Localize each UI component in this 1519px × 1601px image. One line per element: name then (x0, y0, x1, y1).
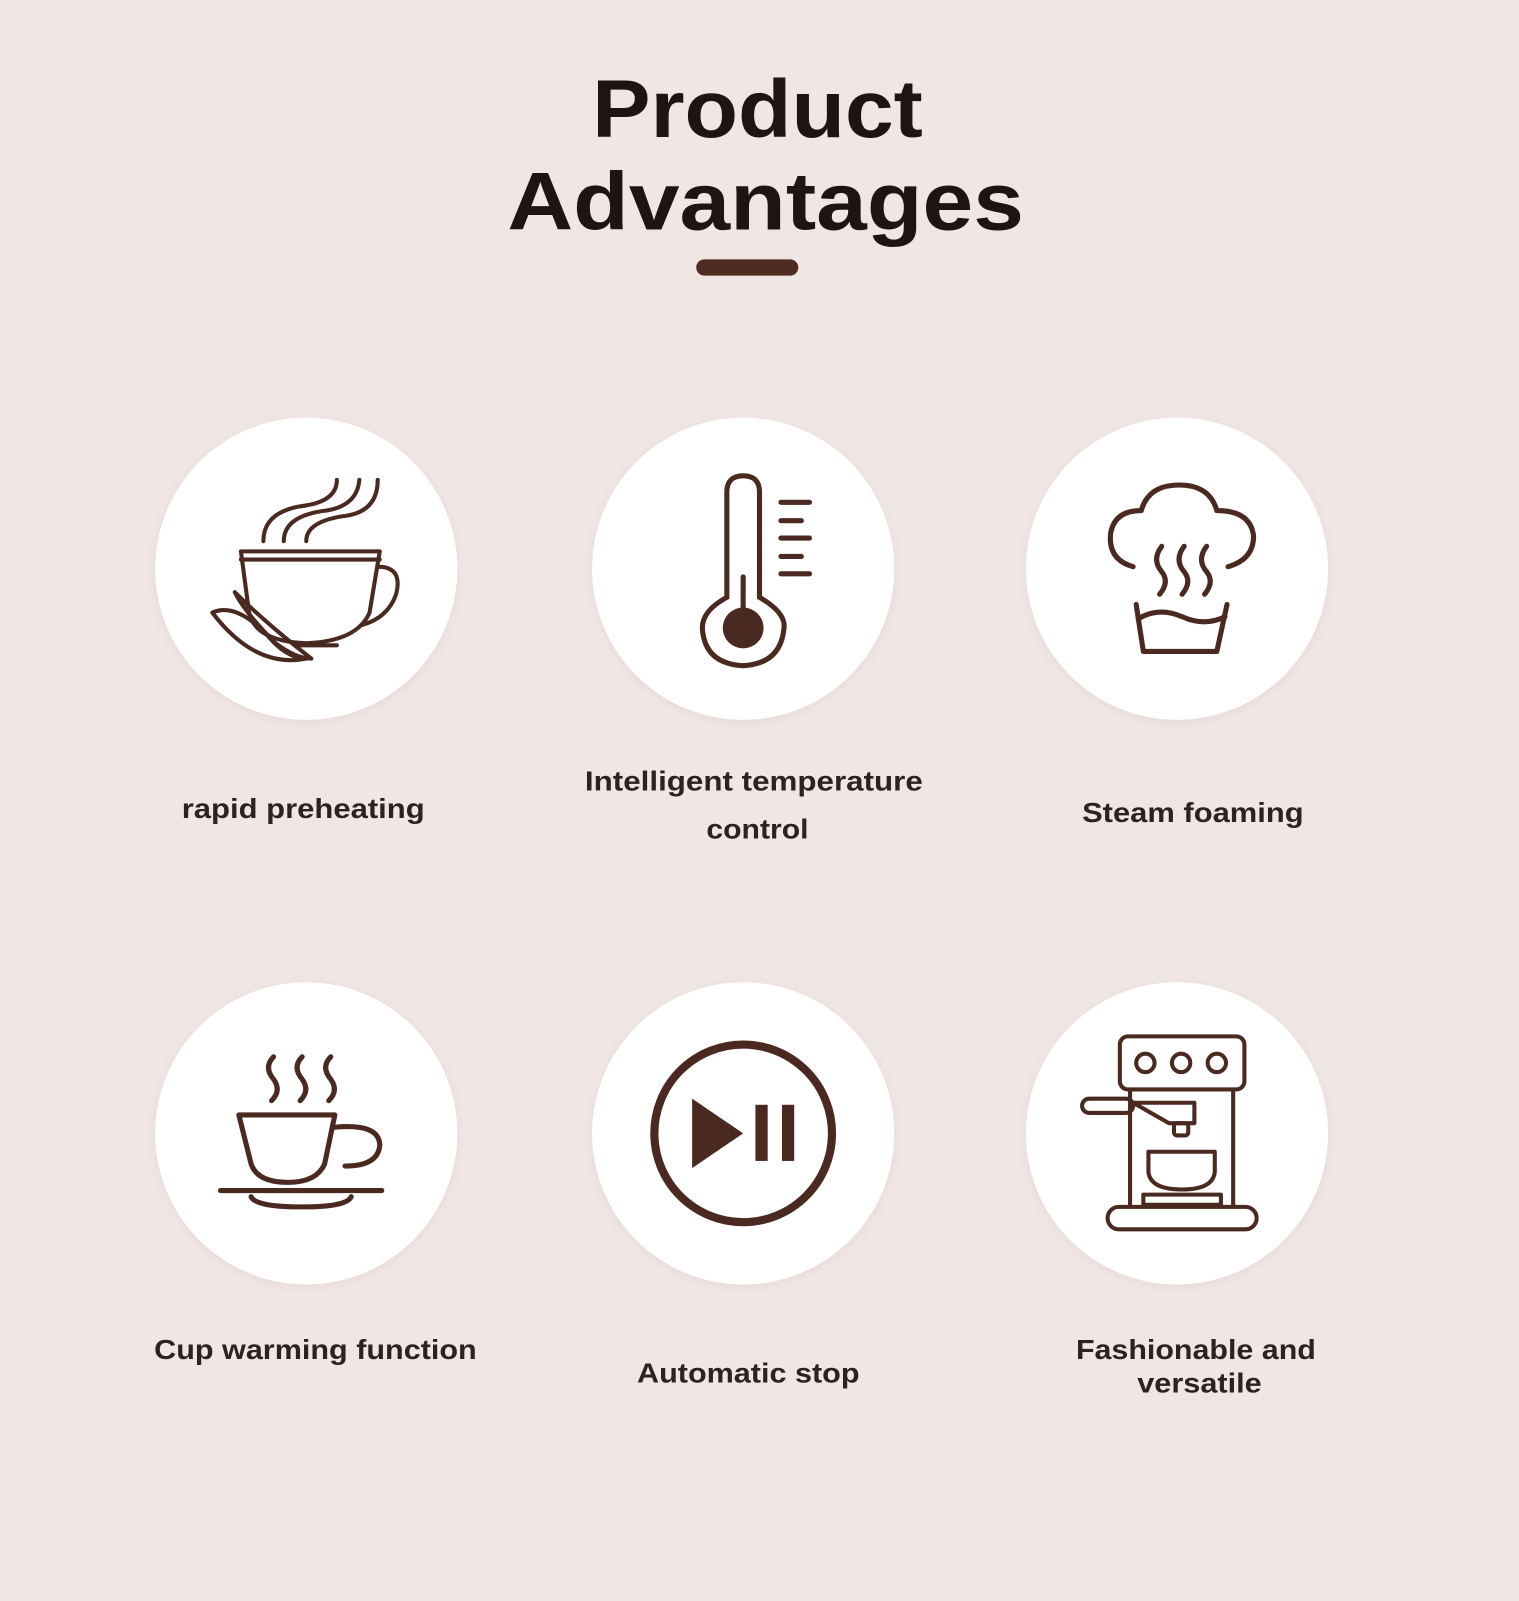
label: automatic stop: Automatic stop (637, 1357, 860, 1388)
icon: play pause (654, 1045, 832, 1222)
title underline (696, 259, 798, 276)
panel: steam foaming (1026, 418, 1328, 828)
icon: espresso machine (1082, 1036, 1257, 1229)
label: intelligent temperature control: Intelligent temperature (585, 765, 923, 796)
label: intelligent temperature control: control (706, 813, 808, 844)
panel: automatic stop (592, 982, 894, 1388)
title: Advantages (507, 157, 1024, 248)
icon: chef hat steam (1110, 485, 1254, 651)
icon: teacup with leaves (212, 480, 398, 660)
label: steam foaming: Steam foaming (1082, 797, 1304, 828)
panel: fashionable and versatile (1026, 982, 1328, 1399)
label: intelligent temperature control (585, 765, 923, 844)
label: fashionable and versatile (1076, 1334, 1316, 1399)
title (507, 64, 1024, 248)
label: fashionable and versatile: Fashionable and (1076, 1334, 1316, 1365)
label: rapid preheating: rapid preheating (182, 793, 425, 824)
panel: intelligent temperature control (585, 418, 923, 844)
icon: thermometer (702, 476, 810, 666)
label: fashionable and versatile: versatile (1137, 1368, 1262, 1399)
label: cup warming function: Cup warming function (154, 1334, 477, 1365)
panel: cup warming function (154, 982, 477, 1365)
title: Product (592, 64, 923, 155)
icon: coffee cup saucer (220, 1057, 382, 1207)
panel: rapid preheating (155, 418, 457, 824)
